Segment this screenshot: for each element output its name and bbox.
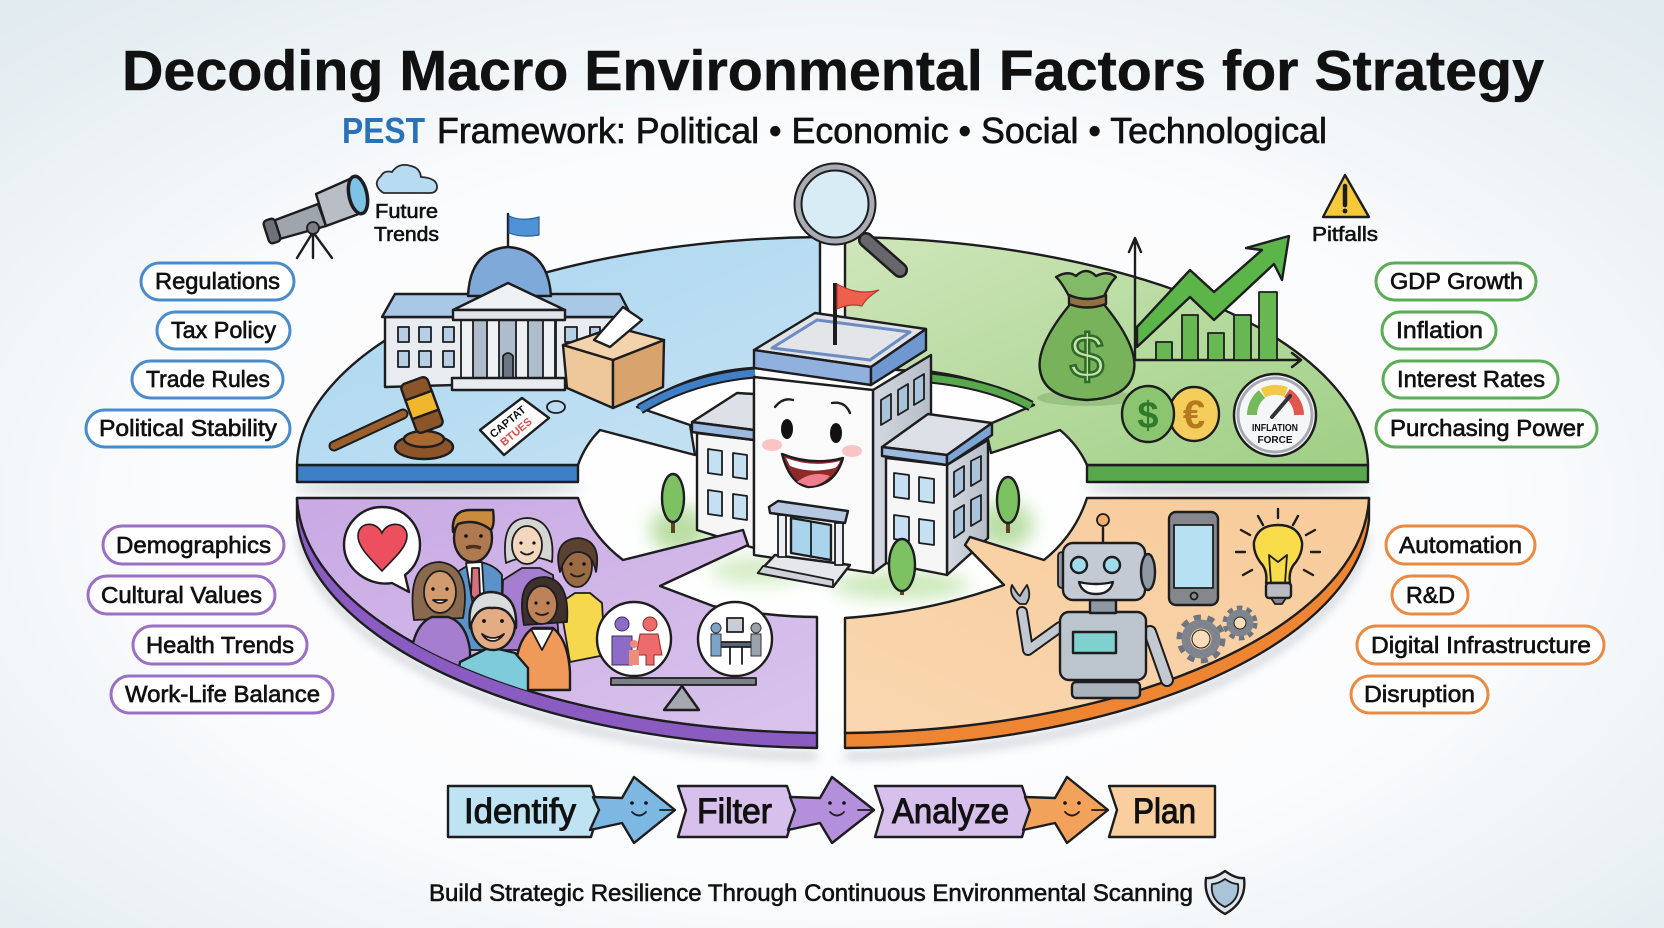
pill: disruption: Disruption (1364, 681, 1475, 707)
label: pitfalls: Pitfalls (1312, 224, 1378, 246)
pill: work-life balance (111, 676, 333, 713)
arms (1022, 612, 1060, 650)
icon: price tag (480, 398, 565, 455)
icon: warning triangle (1323, 175, 1369, 217)
pill: automation (1386, 526, 1535, 564)
pill: health trends: Health Trends (146, 632, 294, 658)
pill: gdp growth: GDP Growth (1390, 268, 1523, 294)
pill: health trends (133, 626, 307, 664)
icon: robot (1011, 514, 1167, 698)
panel: technological (845, 498, 1369, 756)
icon: ballot box (563, 307, 664, 408)
young man (558, 538, 605, 662)
pill: interest rates (1383, 361, 1558, 398)
pill: demographics: Demographics (116, 532, 271, 558)
work meeting circle (698, 602, 772, 676)
main tower (754, 313, 931, 573)
entrance (758, 501, 850, 587)
pill: political stability: Political Stability (99, 415, 278, 441)
beam and pivot (611, 678, 756, 685)
icon: smartphone (1169, 512, 1218, 605)
torso (1060, 612, 1146, 680)
pill: r&d: R&D (1406, 582, 1455, 608)
pills: social factors (88, 526, 333, 713)
family circle (597, 602, 671, 676)
pill: inflation: Inflation (1396, 317, 1483, 343)
face (762, 399, 862, 487)
pill: purchasing power: Purchasing Power (1390, 415, 1584, 441)
arrow: filter to analyze (788, 777, 874, 843)
icon: trees (662, 474, 1019, 595)
pills: political factors (86, 263, 294, 447)
footer tagline: Build Strategic Resilience Through Continuous Environmental Scanning (429, 880, 1193, 907)
pill: regulations (141, 263, 294, 300)
icon: coins (1122, 386, 1219, 442)
pill: tax policy: Tax Policy (171, 317, 276, 343)
portico (462, 320, 556, 378)
pill: cultural values: Cultural Values (101, 582, 262, 608)
pill: interest rates: Interest Rates (1397, 366, 1545, 392)
pill: tax policy (157, 312, 290, 349)
step: identify (448, 786, 599, 837)
icon: gavel (334, 376, 453, 459)
antenna (1102, 528, 1104, 545)
flag (507, 214, 509, 247)
pill: cultural values (88, 576, 275, 614)
subtitle: framework list: Framework: Political • Economic • Social • Technological (437, 110, 1327, 151)
pill: disruption (1351, 676, 1488, 713)
pill: inflation (1382, 312, 1496, 349)
icon: telescope and cloud (263, 165, 439, 258)
icon: capitol building (382, 214, 632, 390)
pills: economic factors (1376, 263, 1597, 447)
icon: balance scale (597, 602, 772, 710)
left wing (692, 393, 754, 548)
illustration: group of people (410, 510, 605, 700)
pill: automation: Automation (1399, 532, 1522, 558)
icon: heart speech bubble (344, 507, 420, 592)
older woman (501, 518, 560, 650)
icon: money bag: $ (1070, 323, 1104, 392)
step: analyze: Analyze (892, 792, 1009, 831)
arrow: analyze to plan (1023, 777, 1108, 843)
flag (835, 283, 879, 345)
head (1058, 552, 1066, 588)
pill: purchasing power (1376, 410, 1597, 447)
step: filter (678, 786, 795, 837)
icon: money bag (1037, 271, 1137, 406)
pill: r&d (1392, 576, 1468, 614)
pill: trade rules (132, 361, 283, 398)
telescope (263, 175, 371, 258)
panel: political (293, 237, 820, 495)
pill: digital infrastructure: Digital Infrastructure (1371, 632, 1591, 658)
pill: political stability (86, 410, 290, 447)
panel: social (297, 498, 817, 756)
right wing (882, 414, 992, 575)
cloud (377, 165, 437, 193)
bars (1156, 292, 1277, 360)
growth arrow (1137, 236, 1289, 347)
title: Decoding Macro Environmental Factors for Strategy (122, 39, 1544, 103)
man in suit (453, 510, 502, 650)
pill: regulations: Regulations (155, 268, 280, 294)
process flow (448, 777, 1215, 843)
woman in purple (412, 561, 472, 670)
icon: price tag: BTUES (498, 416, 535, 449)
axes (1129, 238, 1301, 367)
icon: price tag: CAPTAT (488, 404, 529, 441)
pill: trade rules: Trade Rules (146, 366, 270, 392)
icon: light bulb (1236, 509, 1320, 604)
step: filter: Filter (697, 792, 772, 831)
icon: gauge: INFLATION (1252, 423, 1298, 434)
icon: gears (1181, 609, 1254, 659)
subtitle: PEST: PEST (342, 110, 425, 151)
pill: demographics (103, 526, 284, 564)
older man (457, 592, 528, 700)
wings (385, 317, 630, 387)
step: plan (1109, 786, 1215, 837)
step: plan: Plan (1133, 792, 1196, 831)
pill: digital infrastructure (1357, 626, 1604, 664)
icon: gauge (1234, 374, 1316, 456)
woman in orange (515, 577, 570, 690)
chart: growth bars and arrow (1129, 236, 1301, 367)
panel: economic (845, 237, 1373, 495)
subtitle (342, 110, 1327, 151)
pill: gdp growth (1376, 263, 1536, 300)
icon: coins: € (1183, 393, 1205, 437)
pills: technological factors (1351, 526, 1604, 713)
label: future trends: Trends (374, 224, 439, 246)
icon: shield (1206, 871, 1244, 914)
label: future trends: Future (375, 201, 438, 223)
icon: magnifying glass (798, 167, 900, 270)
icon: coins: $ (1137, 395, 1159, 437)
arrow: identify to filter (590, 777, 675, 843)
pill: work-life balance: Work-Life Balance (125, 681, 320, 707)
center grass (650, 501, 1033, 599)
dome (468, 247, 551, 296)
icon: gauge: FORCE (1258, 435, 1293, 446)
illustration: central building (692, 283, 992, 587)
label: future trends (374, 201, 439, 246)
step: analyze (875, 786, 1030, 837)
step: identify: Identify (464, 792, 576, 831)
